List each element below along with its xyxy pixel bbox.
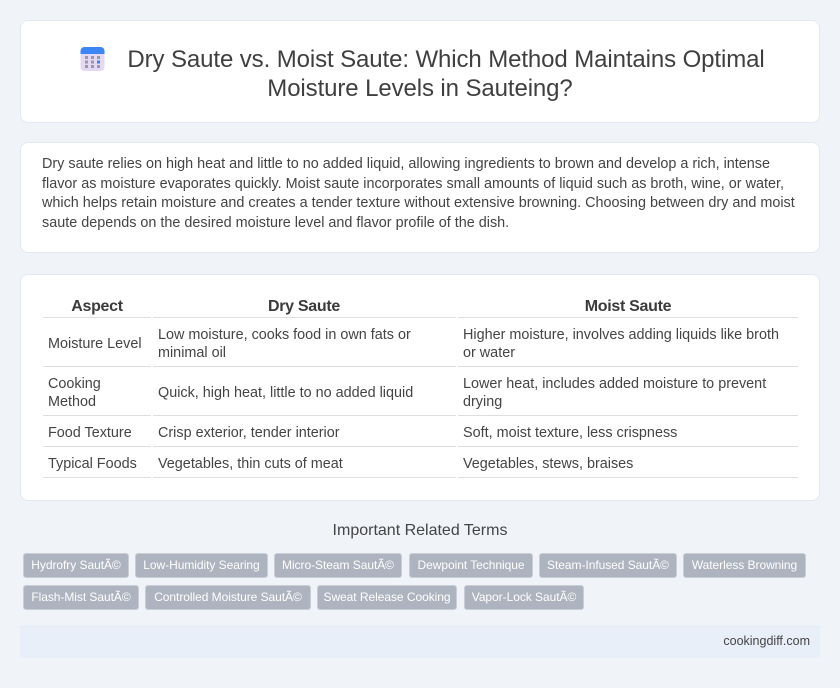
tag: Waterless Browning xyxy=(692,558,797,572)
intro paragraph xyxy=(42,156,795,230)
moist saute food texture: Soft, moist texture, less crispness xyxy=(463,425,677,441)
tag xyxy=(274,553,402,578)
dry saute moisture level: minimal oil xyxy=(158,345,226,361)
moist saute typical foods: Vegetables, stews, braises xyxy=(463,456,633,472)
moist saute cooking method: Lower heat, includes added moisture to prevent xyxy=(463,376,766,392)
footer source: cookingdiff.com xyxy=(723,634,810,648)
tag: Steam-Infused SautÃ© xyxy=(547,558,669,572)
dry saute typical foods: Vegetables, thin cuts of meat xyxy=(158,456,343,472)
tag: Dewpoint Technique xyxy=(418,558,524,572)
row: cooking method: Cooking xyxy=(48,376,101,392)
moist saute moisture level: Higher moisture, involves adding liquids like broth xyxy=(463,327,779,343)
row: food texture: Food Texture xyxy=(48,425,132,441)
related terms tags xyxy=(23,553,806,610)
icon: calendar xyxy=(80,47,104,71)
title: Dry Saute vs. Moist Saute: Which Method Maintains Optimal xyxy=(127,46,765,73)
tag xyxy=(135,553,268,578)
moist saute cooking method: drying xyxy=(463,394,502,410)
comparison table panel xyxy=(20,274,820,501)
tag: Vapor-Lock SautÃ© xyxy=(472,590,576,604)
intro paragraph: flavor as moisture evaporates quickly. Moist saute incorporates small amounts of liquid such as broth, wine, or water, xyxy=(42,176,784,192)
tag: Sweat Release Cooking xyxy=(323,590,451,604)
tag xyxy=(539,553,677,578)
tag xyxy=(145,585,311,610)
moist saute moisture level: or water xyxy=(463,345,515,361)
tag: Controlled Moisture SautÃ© xyxy=(154,590,302,604)
table header: moist saute: Moist Saute xyxy=(585,298,671,315)
tag: Flash-Mist SautÃ© xyxy=(31,590,131,604)
title: Moisture Levels in Sauteing? xyxy=(267,75,573,102)
related terms heading: Important Related Terms xyxy=(333,522,507,539)
tag xyxy=(23,553,129,578)
dry saute moisture level xyxy=(158,327,411,361)
moist saute cooking method xyxy=(463,376,766,410)
intro paragraph: saute depends on the desired moisture level and flavor profile of the dish. xyxy=(42,214,509,230)
row: cooking method: Method xyxy=(48,394,96,410)
header panel xyxy=(20,20,820,123)
tag xyxy=(23,585,139,610)
tag: Micro-Steam SautÃ© xyxy=(282,558,394,572)
row: moisture level: Moisture Level xyxy=(48,336,142,352)
tag xyxy=(317,585,457,610)
table header: dry saute: Dry Saute xyxy=(268,298,340,315)
intro text panel xyxy=(20,142,820,253)
row: cooking method xyxy=(48,376,101,410)
tag xyxy=(464,585,584,610)
row: typical foods: Typical Foods xyxy=(48,456,137,472)
table header: aspect: Aspect xyxy=(71,298,123,315)
tag: Low-Humidity Searing xyxy=(143,558,260,572)
tag xyxy=(409,553,533,578)
dry saute cooking method: Quick, high heat, little to no added liquid xyxy=(158,385,413,401)
title xyxy=(127,46,765,102)
intro paragraph: which helps retain moisture and creates a tender texture without extensive browning. Choosing between dry and moist xyxy=(42,195,795,211)
footer bar xyxy=(20,625,820,658)
dry saute food texture: Crisp exterior, tender interior xyxy=(158,425,340,441)
tag xyxy=(683,553,806,578)
moist saute moisture level xyxy=(463,327,779,361)
dry saute moisture level: Low moisture, cooks food in own fats or xyxy=(158,327,411,343)
tag: Hydrofry SautÃ© xyxy=(31,558,121,572)
intro paragraph: Dry saute relies on high heat and little to no added liquid, allowing ingredients to brown and develop a rich, intense xyxy=(42,156,770,172)
